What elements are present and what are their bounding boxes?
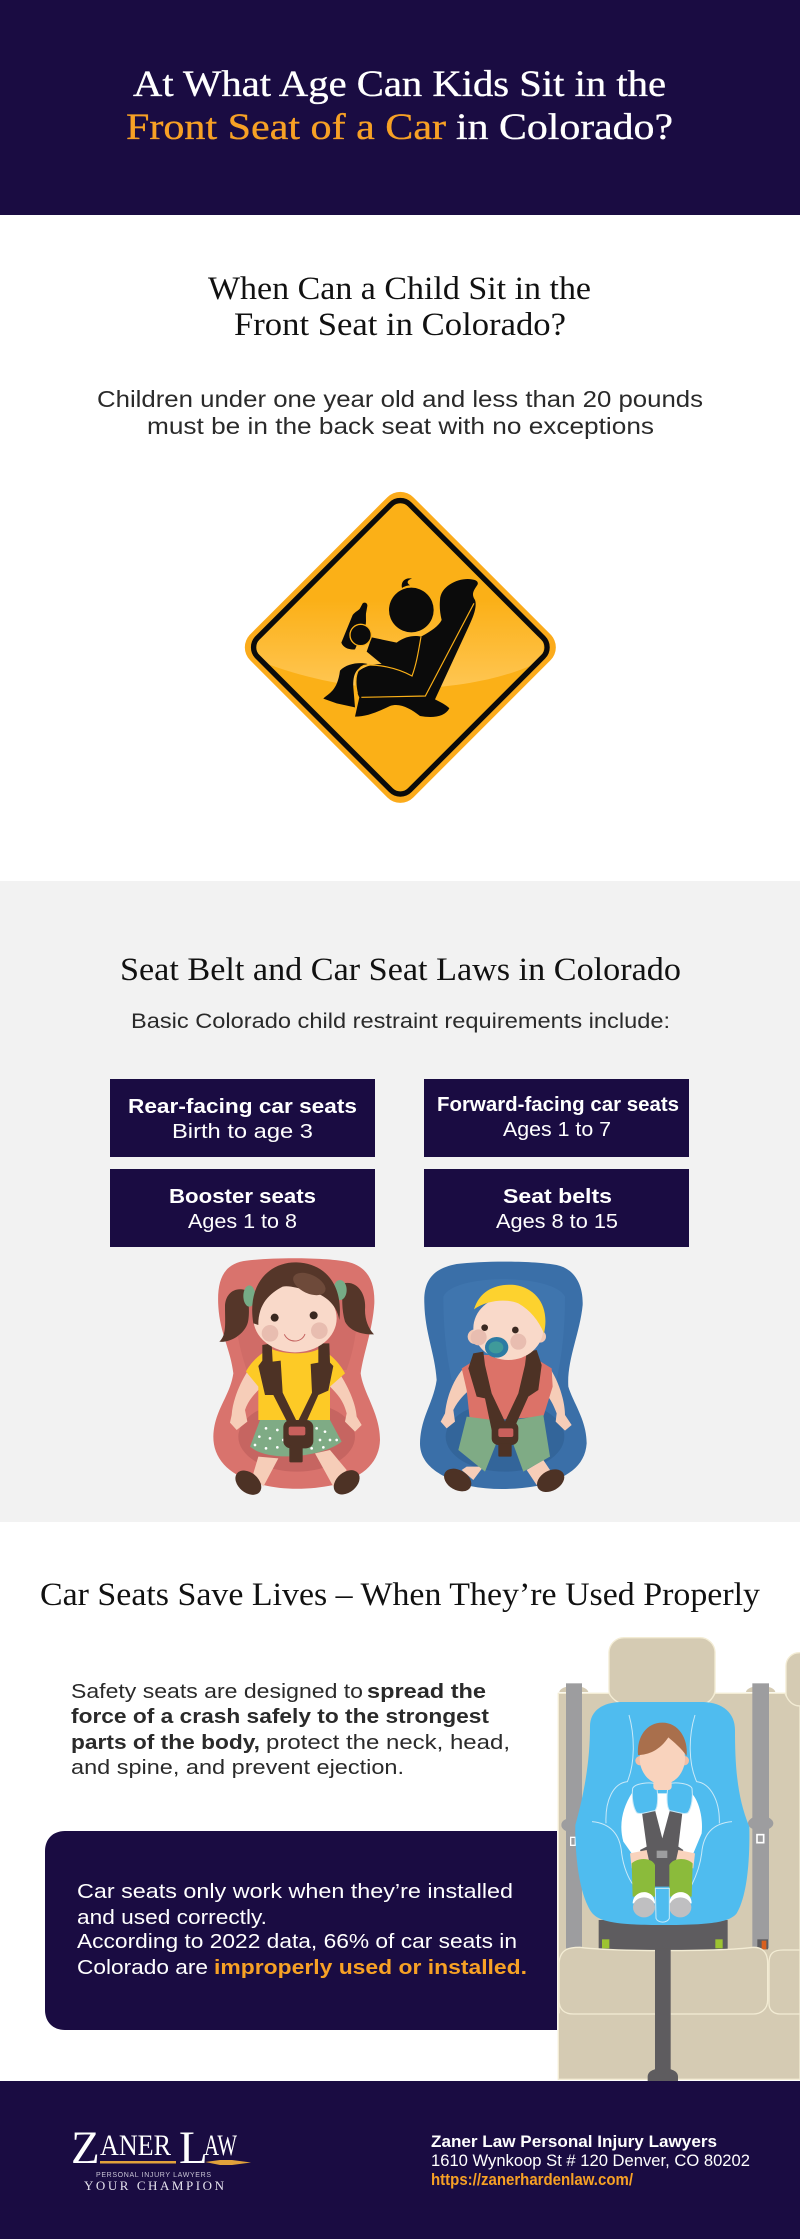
heading: when can a child sit in the front seat: When Can a Child Sit in the xyxy=(208,271,591,307)
logo: Zaner Law: PERSONAL INJURY LAWYERS xyxy=(96,2172,211,2179)
text block: under one year rule xyxy=(97,386,703,439)
text block: safety seats: and spine, and prevent ejection. xyxy=(71,1756,404,1779)
card: forward-facing car seats: Forward-facing car seats xyxy=(437,1093,679,1116)
callout: improper use: Car seats only work when they’re installed xyxy=(77,1880,513,1903)
illustration: girl in red car seat xyxy=(213,1258,380,1500)
panel: car seats save lives xyxy=(0,1522,800,2081)
text block: safety seats xyxy=(71,1680,510,1779)
title: Front Seat of a Car xyxy=(126,107,446,148)
text block: basic requirements: Basic Colorado child restraint requirements include: xyxy=(131,1010,670,1033)
text block: safety seats: spread the xyxy=(367,1680,486,1703)
panel: footer xyxy=(0,2081,800,2239)
card: forward-facing car seats xyxy=(424,1079,689,1157)
text block: contact details xyxy=(431,2133,750,2189)
panel: front seat rule xyxy=(0,215,800,881)
text block: under one year rule: must be in the back seat with no exceptions xyxy=(147,413,654,439)
icon: baby silhouette xyxy=(323,578,478,717)
heading: seat belt and car seat laws: Seat Belt and Car Seat Laws in Colorado xyxy=(120,952,681,988)
text block: safety seats: force of a crash safely to the strongest xyxy=(71,1705,489,1728)
card: booster seats: Ages 1 to 8 xyxy=(188,1210,297,1233)
card: forward-facing car seats: Ages 1 to 7 xyxy=(503,1118,611,1141)
callout: improper use: and used correctly. xyxy=(77,1906,267,1929)
text block: safety seats: Safety seats are designed to xyxy=(71,1680,363,1703)
text block: contact details: 1610 Wynkoop St # 120 Denver, CO 80202 xyxy=(431,2152,750,2170)
logo: Zaner Law: L xyxy=(179,2122,208,2174)
card: rear-facing car seats: Birth to age 3 xyxy=(172,1120,313,1143)
callout: improper use: Colorado are xyxy=(77,1956,208,1979)
logo: Zaner Law: ANER xyxy=(100,2129,171,2162)
card: rear-facing car seats xyxy=(110,1079,375,1157)
card: seat belts xyxy=(424,1169,689,1247)
icon: yellow warning sign with baby in car seat xyxy=(237,484,563,810)
callout: improper use: According to 2022 data, 66% of car seats in xyxy=(77,1930,517,1953)
icon: sign inner ring xyxy=(248,495,553,800)
heading: car seats save lives: Car Seats Save Lives – When They’re Used Properly xyxy=(40,1577,760,1613)
panel: header xyxy=(0,0,800,215)
logo: Zaner Law: YOUR CHAMPION xyxy=(84,2178,225,2193)
title xyxy=(126,64,673,148)
callout: improper use: improperly used or installed. xyxy=(214,1956,527,1979)
card: rear-facing car seats: Rear-facing car seats xyxy=(128,1095,357,1118)
illustration: child in car seat on back seat xyxy=(558,1638,800,2082)
panel: seat belt and car seat laws xyxy=(0,881,800,1522)
card: booster seats xyxy=(110,1169,375,1247)
callout: improper use xyxy=(45,1831,557,2030)
logo: Zaner Law: AW xyxy=(204,2129,237,2162)
card: seat belts: Ages 8 to 15 xyxy=(496,1210,618,1233)
card: seat belts: Seat belts xyxy=(503,1185,612,1208)
logo: Zaner Law xyxy=(71,2122,251,2193)
title: in Colorado? xyxy=(456,107,673,148)
heading: when can a child sit in the front seat xyxy=(208,271,591,343)
heading: when can a child sit in the front seat: Front Seat in Colorado? xyxy=(234,307,566,343)
card: booster seats: Booster seats xyxy=(169,1185,316,1208)
text block: under one year rule: Children under one year old and less than 20 pounds xyxy=(97,386,703,412)
title: At What Age Can Kids Sit in the xyxy=(133,64,666,105)
text block: safety seats: protect the neck, head, xyxy=(266,1731,510,1754)
illustration: boy in blue car seat xyxy=(420,1262,587,1497)
logo: Zaner Law: Z xyxy=(71,2122,100,2174)
text block: contact details: Zaner Law Personal Injury Lawyers xyxy=(431,2133,717,2151)
text block: contact details: https://zanerhardenlaw.com/ xyxy=(431,2171,633,2189)
text block: safety seats: parts of the body, xyxy=(71,1731,260,1754)
icon: gloss highlight xyxy=(256,612,544,687)
